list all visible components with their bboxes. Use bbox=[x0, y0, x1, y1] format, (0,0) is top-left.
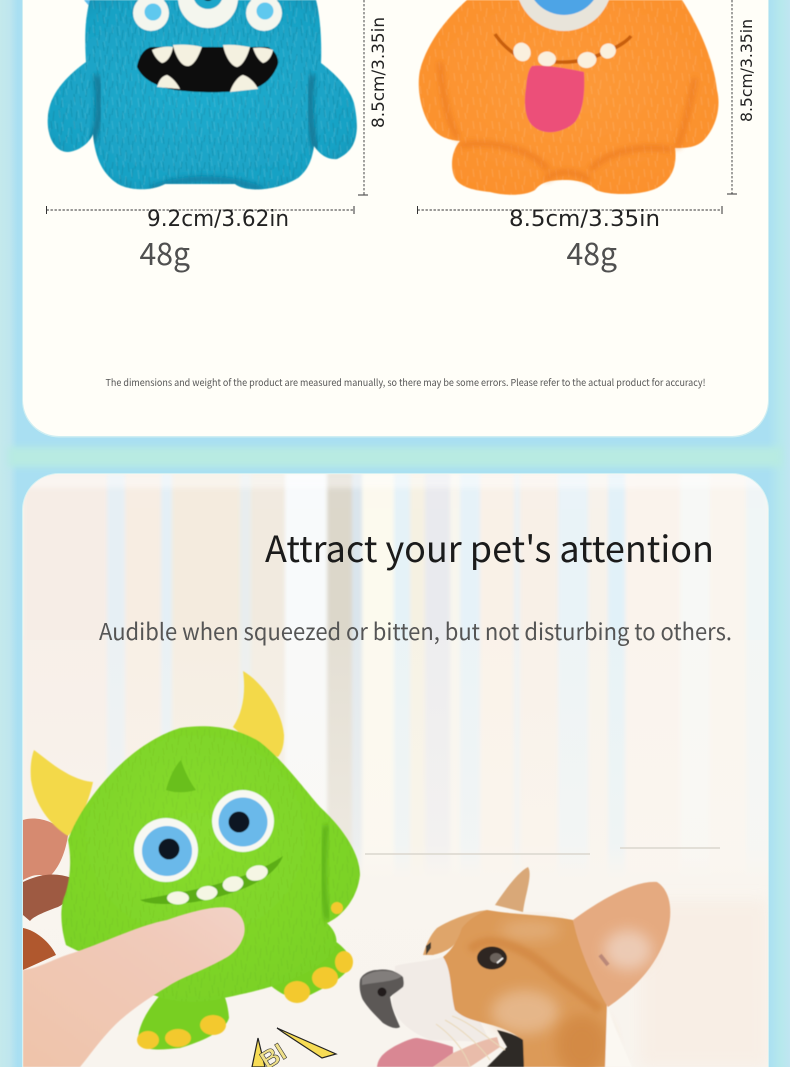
dog whiskers bbox=[436, 1016, 505, 1067]
dog mouth bbox=[377, 1030, 524, 1067]
dog eye bbox=[477, 946, 507, 970]
dog dark fur around eye bbox=[470, 942, 600, 1010]
weight label: blue toy: 48g bbox=[140, 229, 190, 274]
hand fingers behind toy bbox=[23, 819, 72, 970]
panel rim: attract attention photo bbox=[22, 473, 769, 1067]
dog head bbox=[443, 910, 607, 1067]
dog white muzzle bbox=[392, 957, 490, 1042]
panel: product dimensions bbox=[22, 0, 769, 438]
blue monster body and arms bbox=[40, 0, 365, 200]
blue monster horn bbox=[84, 0, 110, 14]
green monster arm shading bbox=[323, 825, 328, 920]
orange monster smile bbox=[495, 34, 631, 62]
green monster feet bbox=[138, 988, 229, 1050]
measurement disclaimer: The dimensions and weight of the product are measured manually, so there may be some errors. Please refer to the actual product for accuracy! bbox=[106, 375, 706, 389]
warm floor patch bbox=[648, 908, 761, 1058]
dog large ear bbox=[573, 882, 670, 1007]
blue monster eyes bbox=[133, 0, 282, 31]
dog nose bbox=[360, 969, 404, 1028]
weight label: orange toy: 48g bbox=[566, 229, 617, 274]
vertical dimension line: orange toy bbox=[727, 0, 737, 194]
dog far brow bbox=[423, 910, 487, 955]
orange monster teeth bbox=[510, 40, 618, 70]
blue monster toy bbox=[40, 0, 365, 200]
dog neck shade bbox=[556, 1015, 608, 1067]
height label: orange toy: 8.5cm/3.35in bbox=[737, 19, 756, 122]
orange monster arm and foot shading bbox=[440, 62, 695, 180]
green monster teeth bbox=[167, 863, 270, 904]
divider band between panels bbox=[8, 447, 782, 467]
curtain background bbox=[23, 474, 768, 1067]
white top glow bbox=[32, 474, 636, 489]
shelf shadow line bbox=[365, 848, 720, 854]
green monster body bbox=[61, 726, 360, 1002]
green monster toes bbox=[137, 902, 353, 1049]
blue monster teeth bbox=[152, 45, 273, 92]
dog light cheek bbox=[491, 990, 559, 1034]
dog white chest bbox=[604, 1005, 621, 1067]
subheading: Audible when squeezed or bitten, but not disturbing to others. bbox=[99, 613, 732, 647]
vertical dimension line: blue toy bbox=[358, 0, 368, 195]
orange monster toy bbox=[419, 0, 719, 195]
curtain stripes bbox=[26, 474, 766, 860]
green monster smile bbox=[140, 856, 283, 904]
horizontal dimension line: blue toy bbox=[46, 206, 354, 214]
corgi dog bbox=[360, 867, 670, 1067]
green monster horns bbox=[31, 671, 284, 836]
green monster nub bbox=[166, 760, 196, 792]
width label: blue toy: 9.2cm/3.62in bbox=[147, 207, 289, 232]
orange monster tongue bbox=[525, 66, 584, 132]
heading: Attract your pet's attention bbox=[265, 521, 714, 573]
orange monster body bbox=[419, 0, 719, 195]
width label: orange toy: 8.5cm/3.35in bbox=[509, 207, 660, 232]
height label: blue toy: 8.5cm/3.35in bbox=[369, 17, 389, 128]
curtain fade near floor bbox=[26, 640, 765, 915]
thumb holding toy bbox=[23, 907, 245, 1067]
yellow sticker fragment bbox=[252, 1028, 336, 1067]
green monster toy bbox=[31, 671, 360, 1050]
panel: attract attention photo bbox=[23, 474, 768, 1067]
horizontal dimension line: orange toy bbox=[418, 206, 722, 214]
dog small ear bbox=[495, 867, 530, 912]
orange monster eye bbox=[516, 0, 612, 31]
green monster eyes bbox=[134, 790, 274, 882]
blue monster mouth bbox=[137, 47, 278, 92]
